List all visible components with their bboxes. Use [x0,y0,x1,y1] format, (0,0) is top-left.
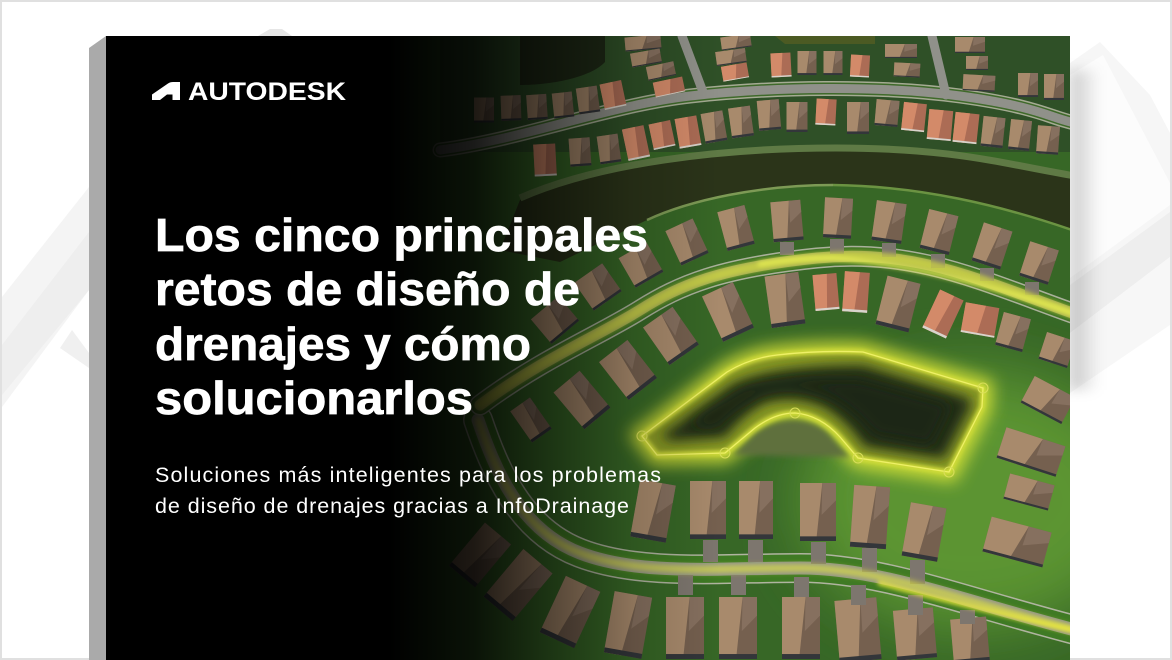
upper lagoon [500,36,1075,262]
title: drenajes y cómo [155,318,531,370]
logo mark [152,82,180,100]
subtitle [155,463,661,518]
title: solucionarlos [155,372,473,424]
pond outer glow [642,351,983,472]
background decorative shapes: right [1070,42,1170,393]
lower main road [478,420,1075,630]
left black fade [106,36,701,660]
title [155,209,648,424]
glowing road path: lower [478,420,1075,630]
aerial base [406,36,1070,660]
upper road [440,36,1075,150]
island [733,420,850,457]
houses: lower streets [449,479,990,660]
pond bank glow fill [642,351,983,472]
logo [152,78,346,106]
middle road [480,256,1075,405]
pond water [660,365,971,459]
retention pond [637,351,988,477]
subtitle: Soluciones más inteligentes para los problemas [155,463,661,487]
houses: middle streets [510,197,1076,567]
title: Los cinco principales [155,209,648,261]
pond outline glow [642,351,983,472]
subtitle: de diseño de drenajes gracias a InfoDrainage [155,494,629,518]
book spine [89,36,106,660]
background decorative shapes: left [2,29,292,407]
pond water centre [692,381,938,436]
logo wordmark: AUTODESK [188,78,346,106]
glowing road path: middle [480,256,1075,405]
title: retos de diseño de [155,263,580,315]
pond nodes [637,383,988,477]
houses: top streets [474,33,1064,177]
pond outline [642,351,983,472]
driveways [678,239,1039,624]
